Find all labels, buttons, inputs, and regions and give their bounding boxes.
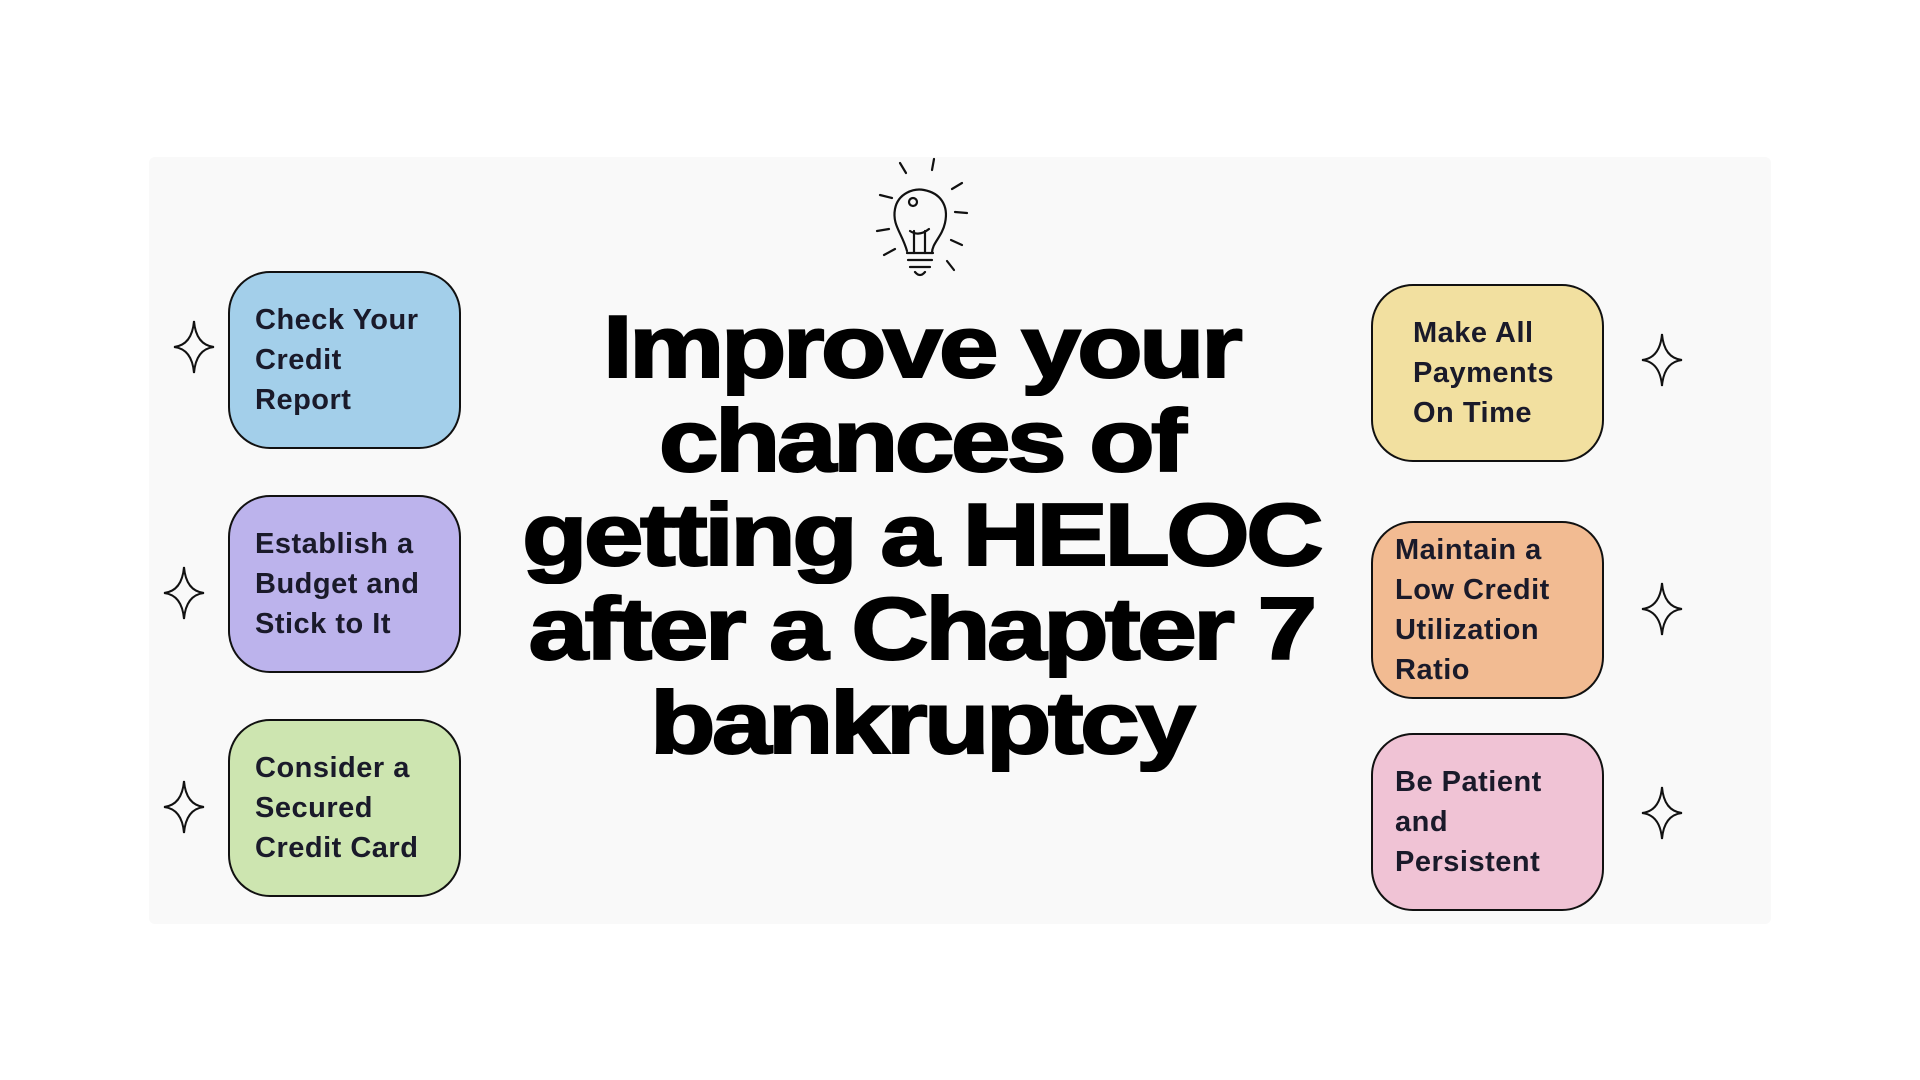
- box: low utilization: Ratio: [1395, 654, 1470, 686]
- box: low utilization: Utilization: [1395, 614, 1539, 646]
- box: payments on time: On Time: [1413, 397, 1532, 429]
- box: establish budget: Establish a: [255, 528, 414, 560]
- icon: sparkle right 2: [1642, 582, 1682, 636]
- box: establish budget: [228, 495, 461, 673]
- box: secured credit card: Secured: [255, 792, 373, 824]
- title: [522, 297, 1322, 772]
- icon: sparkle right 3: [1642, 786, 1682, 840]
- title: bankruptcy: [650, 673, 1192, 772]
- box: payments on time: Make All: [1413, 317, 1534, 349]
- box: patient: Persistent: [1395, 846, 1540, 878]
- box: payments on time: Payments: [1413, 357, 1554, 389]
- box: payments on time: [1371, 284, 1604, 462]
- icon: light bulb: [876, 158, 968, 276]
- box: establish budget: Stick to It: [255, 608, 391, 640]
- background panel: [149, 157, 1771, 924]
- box: check credit report: [228, 271, 461, 449]
- icon: sparkle left 3: [164, 780, 204, 834]
- title: getting a HELOC: [522, 485, 1320, 584]
- title: Improve your: [603, 297, 1239, 396]
- box: check credit report: Report: [255, 384, 351, 416]
- box: secured credit card: Consider a: [255, 752, 410, 784]
- box: low utilization: [1371, 521, 1604, 699]
- box: patient: [1371, 733, 1604, 911]
- box: secured credit card: Credit Card: [255, 832, 418, 864]
- icon: sparkle right 1: [1642, 334, 1682, 386]
- icon: sparkle left 1: [174, 320, 214, 374]
- box: secured credit card: [228, 719, 461, 897]
- box: patient: Be Patient: [1395, 766, 1542, 798]
- box: low utilization: Low Credit: [1395, 574, 1550, 606]
- icon: sparkle left 2: [164, 566, 204, 620]
- box: check credit report: Credit: [255, 344, 342, 376]
- box: low utilization: Maintain a: [1395, 534, 1542, 566]
- title: chances of: [659, 391, 1183, 490]
- title: after a Chapter 7: [528, 579, 1314, 678]
- box: establish budget: Budget and: [255, 568, 420, 600]
- box: check credit report: Check Your: [255, 304, 418, 336]
- box: patient: and: [1395, 806, 1448, 838]
